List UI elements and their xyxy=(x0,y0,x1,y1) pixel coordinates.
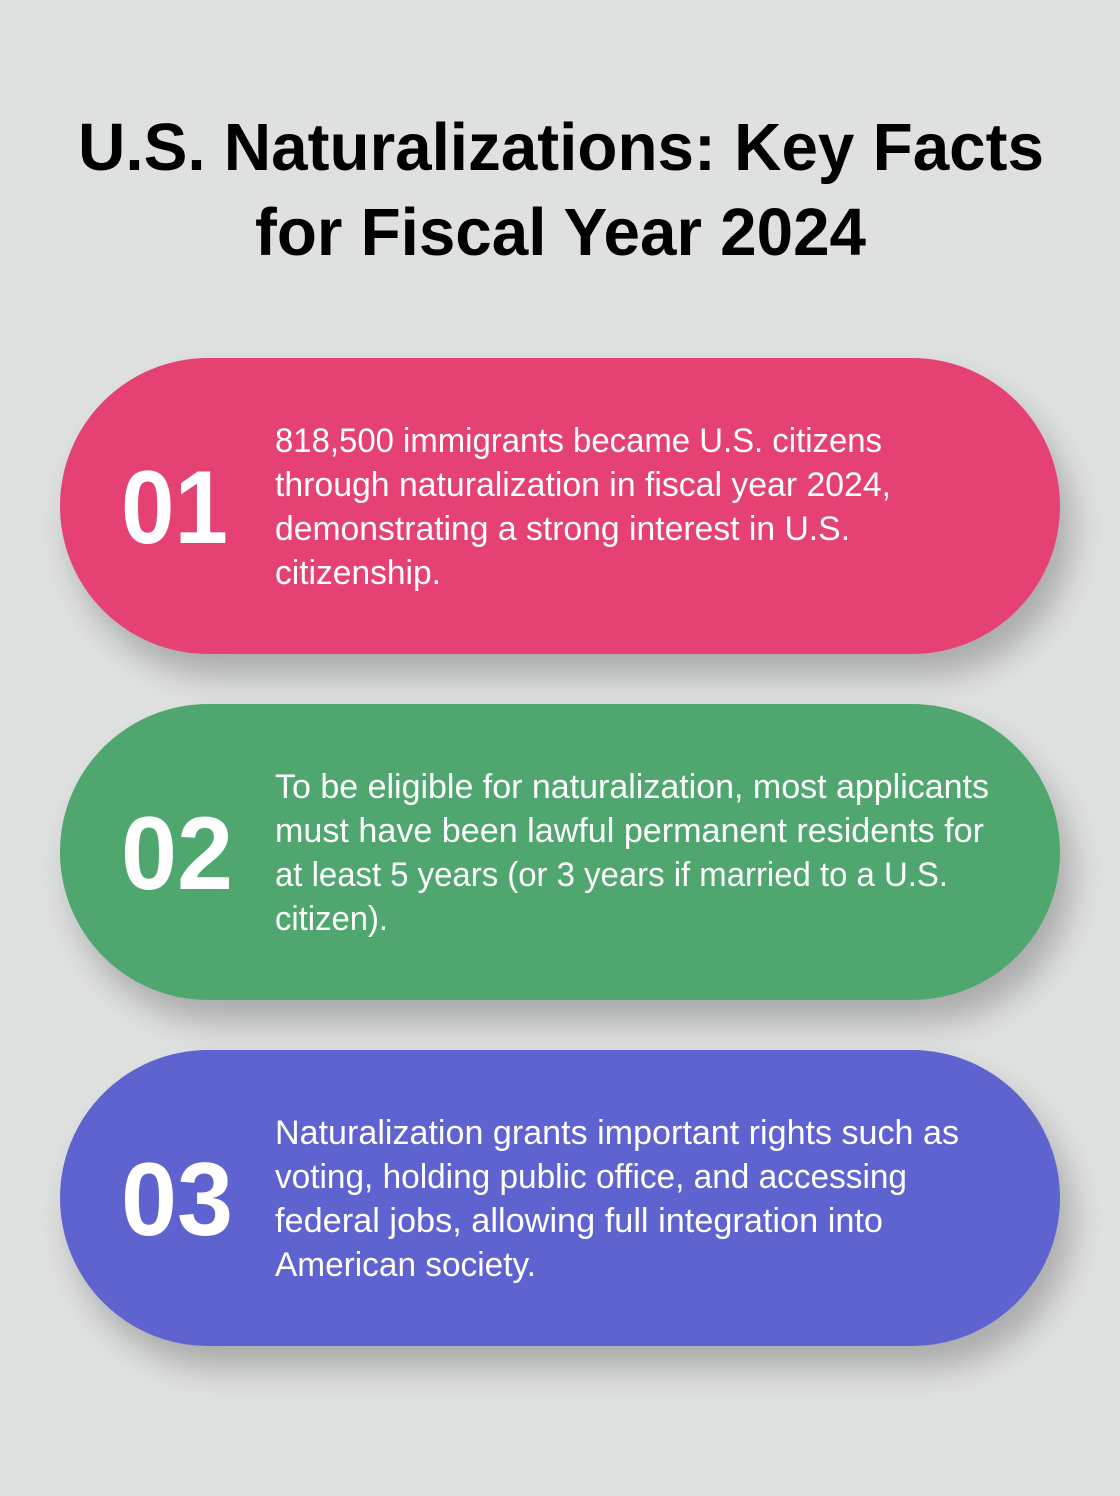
text: fact 02 xyxy=(275,768,989,938)
panel: fact 03 xyxy=(60,1050,1060,1346)
text: fact 02: citizen). xyxy=(275,900,388,938)
text: fact 01: demonstrating a strong interest in U.S. xyxy=(275,510,850,548)
text: fact 01: through naturalization in fiscal year 2024, xyxy=(275,466,891,504)
text: fact 03: American society. xyxy=(275,1246,536,1284)
number 01: 01 xyxy=(121,450,228,566)
title: for Fiscal Year 2024 xyxy=(255,195,866,270)
text: fact 01: 818,500 immigrants became U.S. citizens xyxy=(275,422,882,460)
text: fact 02: must have been lawful permanent residents for xyxy=(275,812,984,850)
text: fact 01: citizenship. xyxy=(275,554,441,592)
text: fact 03 xyxy=(275,1114,959,1284)
text: fact 01 xyxy=(275,422,891,592)
panel: fact 01 xyxy=(60,358,1060,654)
number 03: 03 xyxy=(121,1142,233,1258)
panel: fact 02 xyxy=(60,704,1060,1000)
text: fact 03: voting, holding public office, and accessing xyxy=(275,1158,907,1196)
title: U.S. Naturalizations: Key Facts xyxy=(78,110,1044,185)
text: fact 03: Naturalization grants important rights such as xyxy=(275,1114,959,1152)
number 02: 02 xyxy=(121,796,233,912)
text: fact 02: To be eligible for naturalization, most applicants xyxy=(275,768,989,806)
title xyxy=(78,110,1044,270)
text: fact 03: federal jobs, allowing full integration into xyxy=(275,1202,883,1240)
text: fact 02: at least 5 years (or 3 years if married to a U.S. xyxy=(275,856,948,894)
